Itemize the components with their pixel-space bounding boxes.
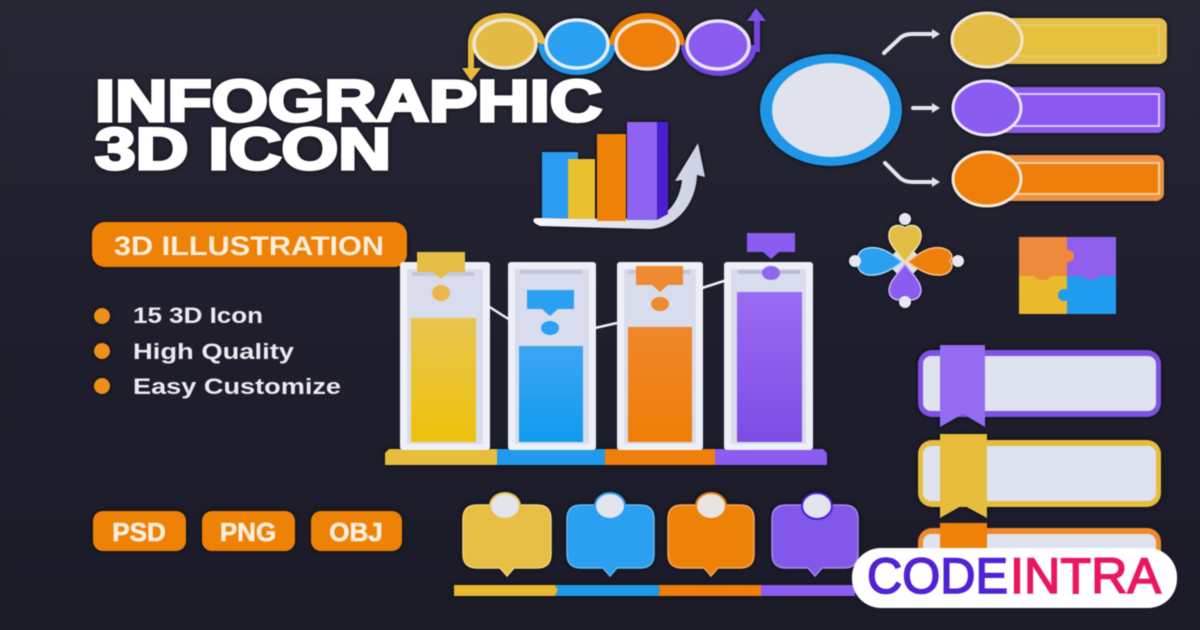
ribbon card: purple <box>918 345 1161 427</box>
feature list: Easy Customize <box>133 374 341 399</box>
format tags: OBJ <box>329 517 383 547</box>
feature list: High Quality <box>133 339 295 364</box>
badge: 3D illustration: 3D ILLUSTRATION <box>114 231 384 261</box>
callout: yellow <box>463 493 551 576</box>
pill bar: purple <box>953 81 1165 135</box>
segmented bar <box>454 585 855 596</box>
chain of circles with arrows <box>462 8 766 81</box>
callout: orange <box>668 493 754 576</box>
logo: CODEINTRA: CODE <box>867 548 1008 604</box>
flower diagram <box>849 213 964 308</box>
callout: purple <box>772 493 858 576</box>
feature list <box>94 303 341 399</box>
badge: 3D illustration <box>92 222 407 267</box>
format tags: PNG <box>220 517 276 547</box>
ribbon card: yellow <box>918 434 1161 518</box>
3D bar chart with arrow <box>533 122 705 229</box>
arrows from hub <box>884 29 940 187</box>
column 2: blue <box>508 262 596 450</box>
title: 3D ICON <box>95 117 391 182</box>
format tags <box>93 511 402 551</box>
connector line <box>488 280 727 328</box>
column chart base <box>385 449 827 465</box>
column 4: purple <box>724 233 813 450</box>
pill bar: orange <box>953 152 1164 206</box>
ribbon card: orange <box>918 523 1161 595</box>
feature list: 15 3D Icon <box>133 303 263 328</box>
format tags: PSD <box>112 517 166 547</box>
callout: blue <box>567 493 654 576</box>
hub circle <box>760 54 902 166</box>
logo: CODEINTRA <box>852 548 1177 608</box>
puzzle icon <box>1019 237 1116 314</box>
column 1: yellow <box>400 252 490 450</box>
column 3: orange <box>617 262 703 450</box>
title <box>95 69 602 182</box>
pill bar: yellow <box>952 13 1167 67</box>
logo: CODEINTRA: INTRA <box>1010 548 1162 604</box>
title: INFOGRAPHIC <box>95 69 602 134</box>
